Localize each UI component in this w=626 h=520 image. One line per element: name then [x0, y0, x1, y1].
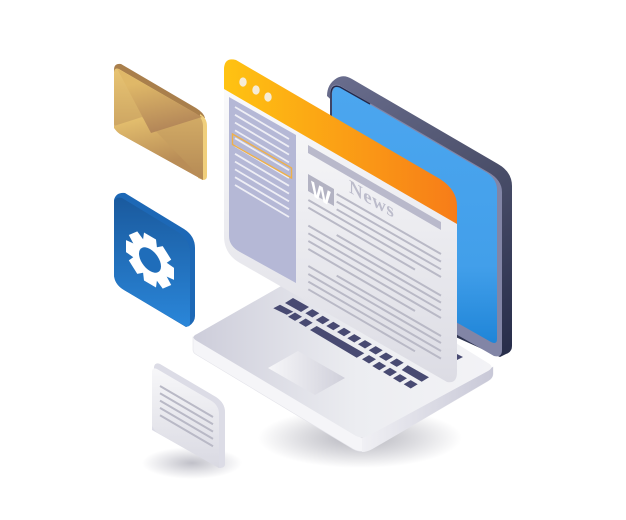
sidebar lines — [235, 107, 289, 217]
envelope bottom fold — [114, 117, 203, 180]
screen back edge — [327, 76, 512, 357]
News heading: News — [349, 176, 394, 223]
base left side — [193, 337, 493, 452]
window page — [224, 88, 457, 382]
shadow: small document — [142, 447, 242, 479]
window dots — [239, 77, 272, 102]
trackpad — [268, 351, 345, 395]
laptop screen — [327, 76, 512, 357]
icon: small document — [152, 363, 225, 468]
envelope front — [114, 68, 203, 180]
base top face — [194, 264, 492, 438]
sidebar — [229, 97, 296, 283]
browser window — [224, 59, 457, 382]
icon: settings tile — [114, 193, 195, 327]
keyboard — [273, 298, 429, 388]
sidebar highlighted item — [232, 134, 292, 178]
article text lines — [308, 194, 441, 359]
document front — [152, 368, 219, 468]
document lines — [160, 386, 213, 446]
document thickness — [152, 363, 225, 468]
base right side — [362, 367, 493, 452]
laptop base — [193, 264, 493, 452]
envelope right edge — [198, 114, 207, 180]
article header bar — [308, 145, 441, 230]
screen bezel — [330, 85, 502, 356]
icon: envelope — [114, 64, 207, 180]
envelope flap — [117, 68, 202, 133]
window title bar — [224, 59, 457, 224]
tile edge — [114, 193, 195, 327]
envelope top edge — [114, 64, 205, 118]
shadow: laptop — [258, 408, 462, 468]
W logo: W — [311, 176, 331, 211]
key behind window — [457, 354, 463, 360]
tile front — [114, 198, 190, 326]
gear — [126, 222, 174, 298]
screen display — [332, 87, 497, 343]
